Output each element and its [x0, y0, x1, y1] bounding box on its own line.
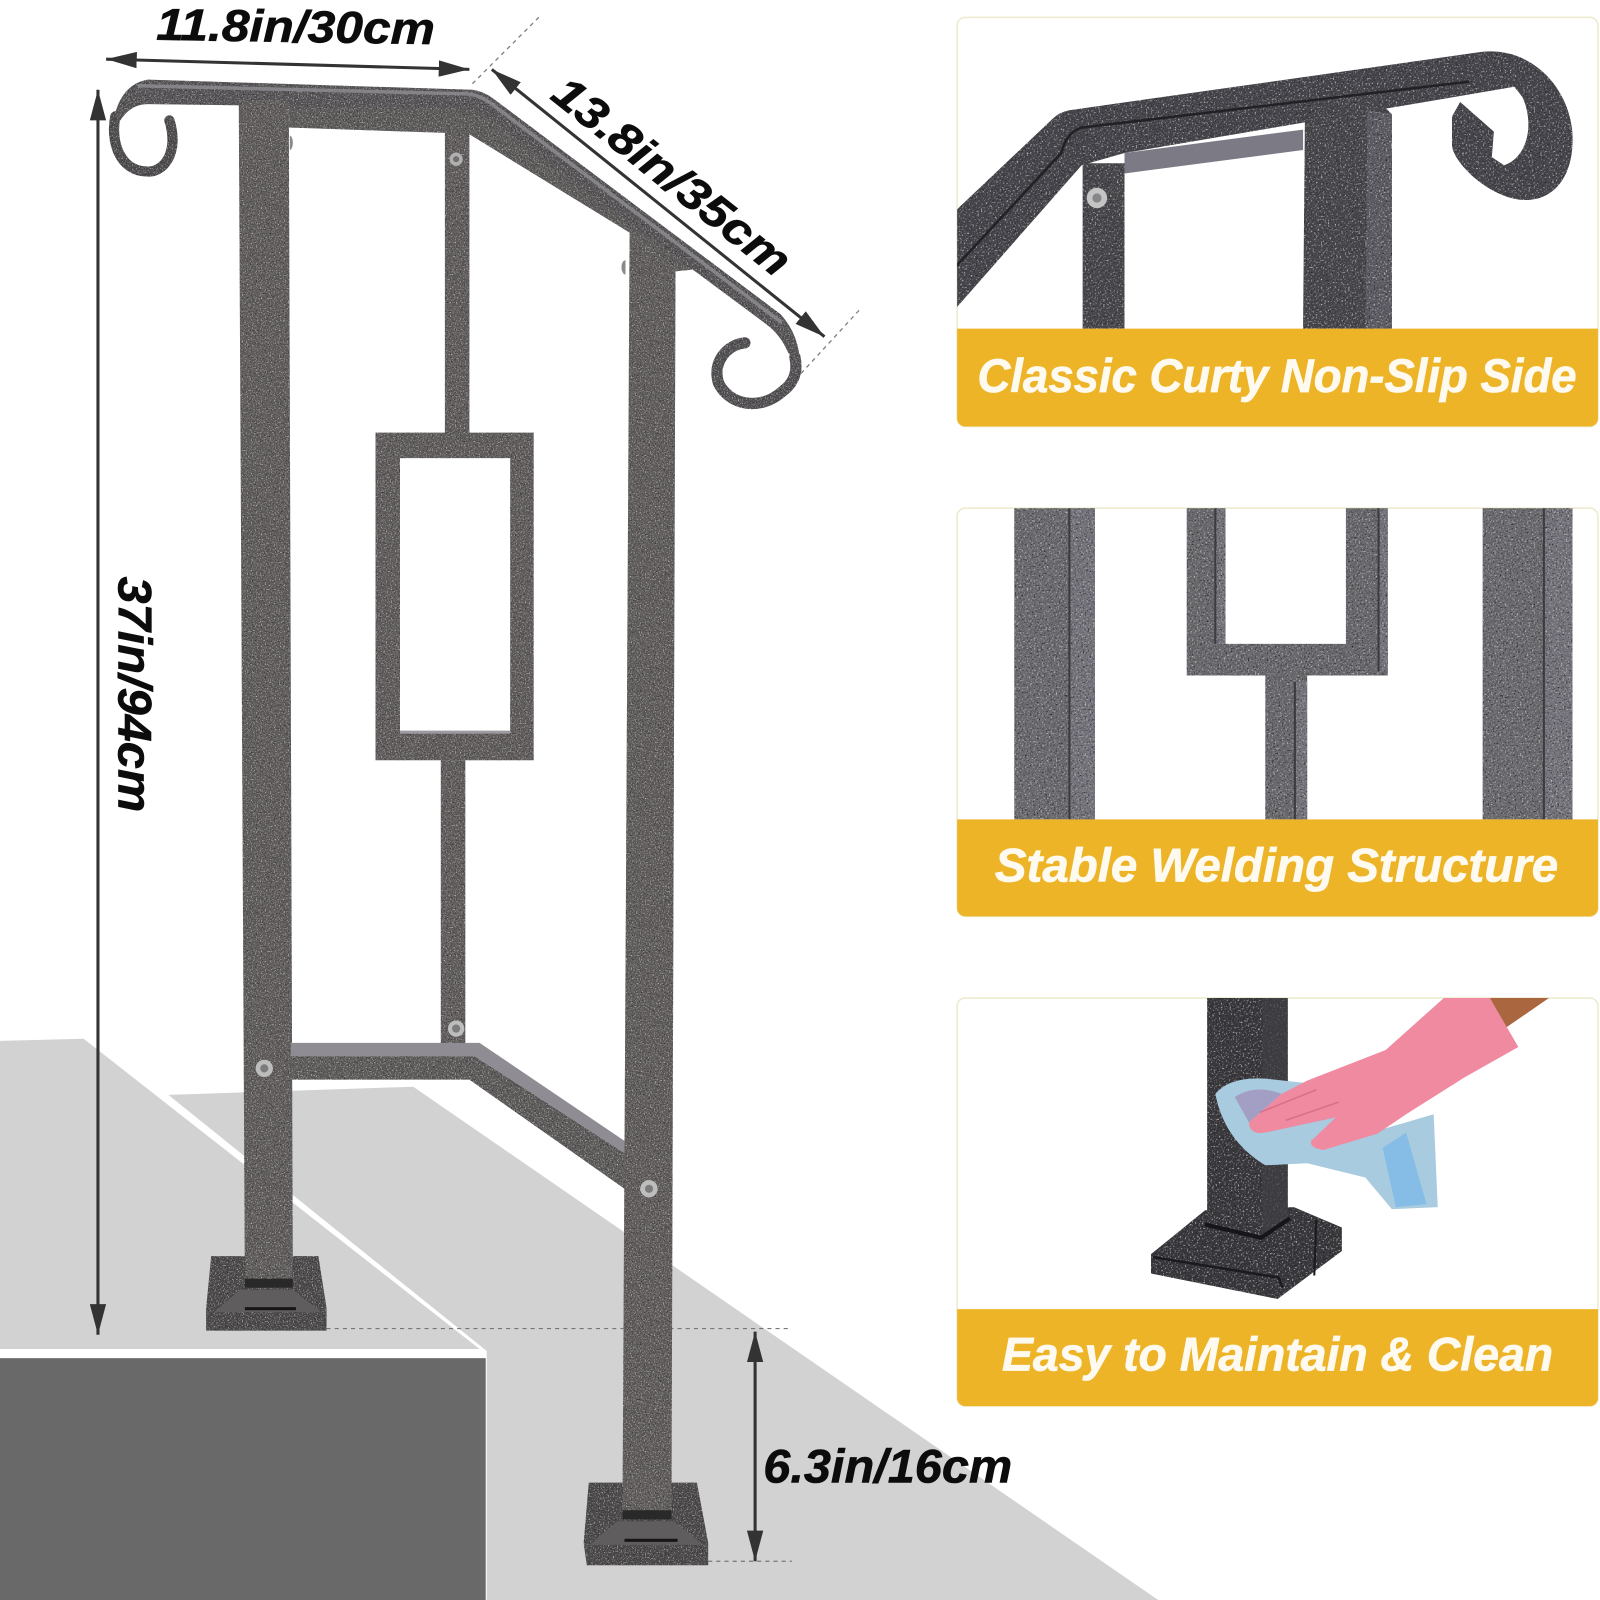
base skirt edge: [1153, 1257, 1283, 1288]
cloth: [1215, 1078, 1438, 1209]
banner: [957, 329, 1598, 427]
right post: [622, 233, 676, 1518]
bolt 1: [256, 1060, 273, 1077]
caption: Easy to Maintain & Clean: [1002, 1328, 1553, 1380]
arrow: [96, 90, 99, 1335]
banner: [957, 1309, 1598, 1406]
caption: Stable Welding Structure: [995, 840, 1558, 892]
underside strip: [1124, 130, 1303, 173]
left base: [206, 1256, 327, 1331]
left base step: [214, 1290, 321, 1312]
bolt 3: [640, 1180, 658, 1197]
panel: classic curly side: [955, 17, 1598, 427]
panel frame: [957, 998, 1598, 1406]
cap edge line: [955, 82, 1469, 267]
post side: [1262, 998, 1288, 1234]
right base step: [590, 1521, 704, 1545]
photo: weld close-up: [1014, 508, 1572, 819]
main railing: [114, 80, 800, 1565]
bolt 2: [448, 1020, 464, 1037]
rail cap: [114, 80, 800, 369]
seam lines: [1068, 508, 1545, 819]
lower rail top face: [291, 1043, 624, 1153]
upper step tread: [0, 1039, 480, 1349]
banner: [957, 819, 1598, 916]
right base slot: [624, 1539, 678, 1542]
rectangular frame: [376, 433, 534, 760]
square frame: [1187, 508, 1388, 676]
photo: rail scroll close-up: [955, 51, 1573, 329]
small baluster: [1083, 163, 1124, 329]
bolt 4: [449, 153, 463, 166]
glove: [1249, 998, 1518, 1150]
right post: [1483, 508, 1572, 819]
right scroll: [717, 343, 796, 404]
panel frame: [957, 508, 1598, 916]
bolt 5 partial: [290, 136, 293, 150]
base corner seam: [1314, 1219, 1316, 1276]
lower baluster: [441, 760, 465, 1054]
post foot shadow: [1205, 1218, 1290, 1238]
stem: [1265, 676, 1307, 819]
panel: stable welding: [957, 508, 1598, 916]
label: 6.3in/16cm: [763, 1441, 1012, 1493]
rail and curl: [955, 51, 1573, 309]
arrow: [754, 1332, 757, 1561]
photo: hand wiping post: [1151, 998, 1549, 1299]
right base: [584, 1483, 708, 1565]
glove finger lines: [1260, 1090, 1339, 1120]
right post lower end shadow: [622, 1510, 671, 1519]
rail cap highlight: [138, 86, 782, 322]
post: [1207, 998, 1288, 1210]
bolt: [1087, 188, 1107, 208]
dimension: top width: [106, 0, 469, 69]
dimension: sloped length: [492, 66, 824, 337]
skin: [1490, 998, 1549, 1028]
left post lower end shadow: [245, 1279, 293, 1288]
left post: [239, 100, 293, 1288]
caption: Classic Curty Non-Slip Side: [978, 350, 1577, 402]
dotted guide lines: [327, 15, 859, 1561]
panel: easy to clean: [957, 998, 1598, 1406]
lower step tread: [168, 1087, 1158, 1600]
left post: [1014, 508, 1095, 819]
arrow: [106, 59, 469, 69]
post side: [1365, 110, 1392, 329]
panel frame: [957, 17, 1598, 427]
cloth fold: [1383, 1133, 1427, 1207]
arrow: [492, 69, 824, 337]
label: 11.8in/30cm: [156, 0, 435, 54]
label: 13.8in/35cm: [543, 66, 801, 286]
label: 37in/94cm: [108, 577, 160, 812]
rail details: [138, 86, 782, 1545]
frame inner ledge: [400, 731, 510, 734]
post: [1303, 90, 1392, 329]
rail under bar: [289, 97, 714, 271]
base plate: [1151, 1207, 1342, 1299]
stair illustration: [0, 1039, 1158, 1600]
lower rail: [291, 1056, 624, 1189]
bolt 6 partial: [621, 260, 626, 274]
left base slot: [245, 1307, 296, 1310]
post side shading: [1070, 508, 1572, 819]
step riser: [0, 1358, 486, 1600]
cloth shadow: [1235, 1089, 1282, 1122]
upper baluster: [445, 133, 469, 435]
left scroll: [114, 116, 173, 172]
